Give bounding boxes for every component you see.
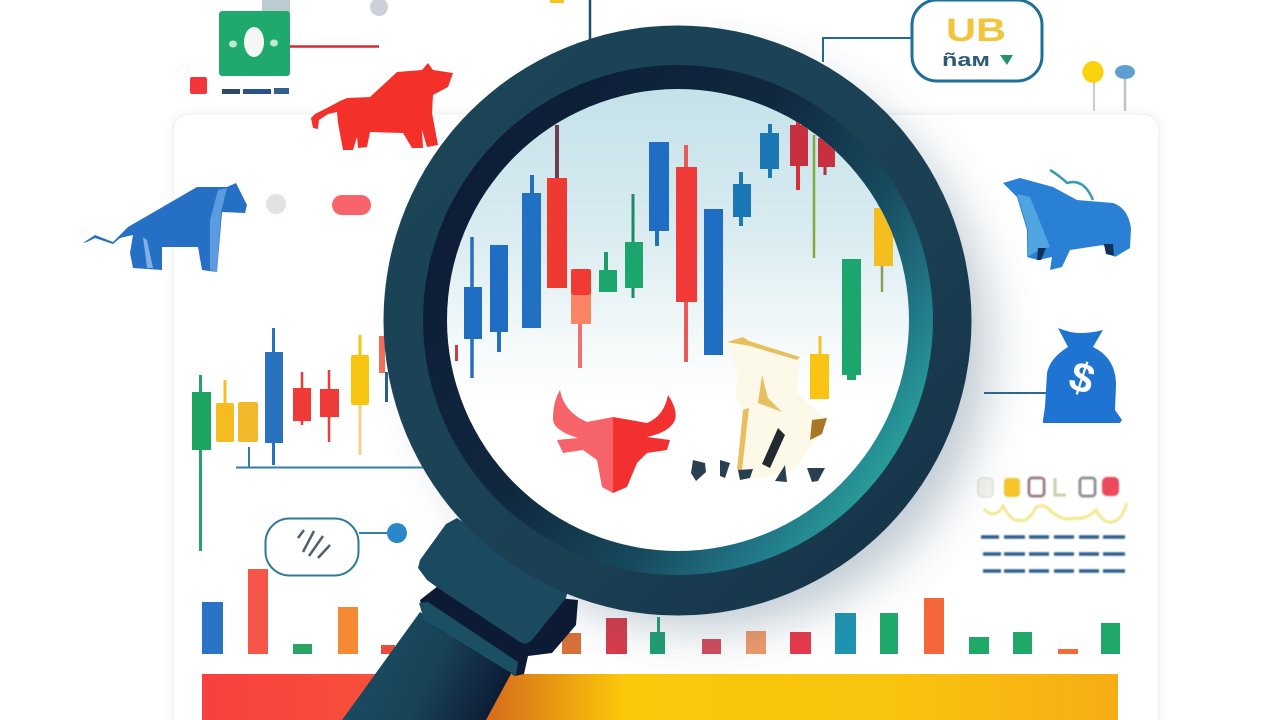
panel: dashboard card [172,113,1160,720]
lens ring [384,26,972,616]
lens glass [447,89,909,551]
callout: top right label: UB [946,12,1006,48]
magnifying glass [342,26,972,720]
icon: blue bull silhouette left [83,183,247,272]
callout: top right label: ñaм [942,50,990,70]
icon: money bag [984,328,1122,423]
icon: cream animal [691,337,827,482]
icon: red bull silhouette [311,63,453,150]
chart: left candlesticks [192,328,425,551]
icon: red square [190,77,207,94]
icon: red bull head [553,390,676,493]
icon: balloon pins [1082,61,1135,111]
chart: candlesticks in lens [455,120,893,399]
bar chart: bottom [202,569,1120,654]
gradient footer band [202,674,1118,720]
table: right data legend [978,477,1127,571]
icon: green tile with connector [219,0,379,94]
callout: left label with dot [266,518,407,576]
callout: top right label [823,0,1042,81]
top pointer line [550,0,590,40]
handle [342,518,578,720]
icon: money bag: $ [1064,352,1101,403]
lens shadow [420,60,990,630]
icon: blue bear silhouette right [1003,170,1131,270]
icon: grey dot top [370,0,388,16]
marker: red pill [332,195,371,215]
marker: grey dot [266,194,286,214]
